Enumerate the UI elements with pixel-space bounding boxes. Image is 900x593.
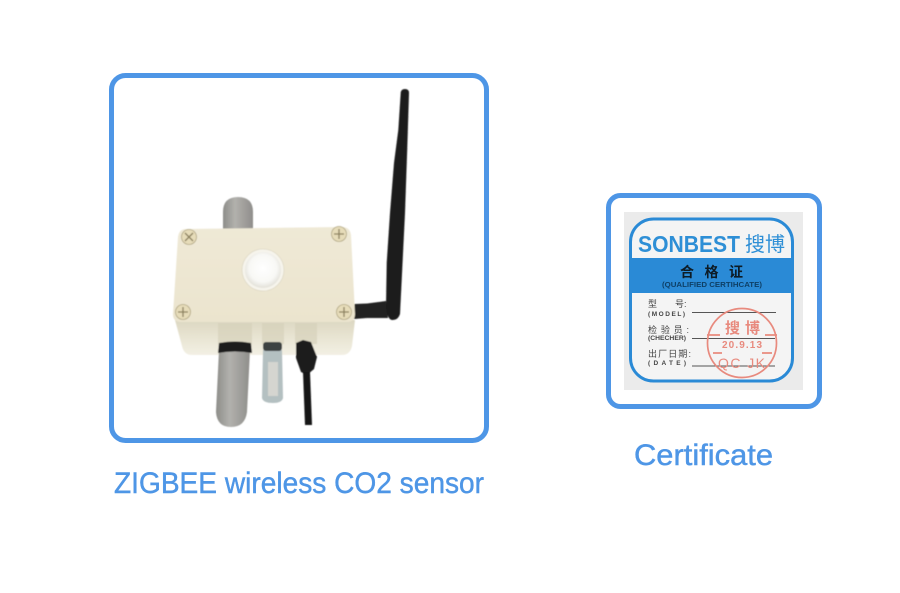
- enclosure lid: [173, 227, 355, 322]
- enclosure body: [175, 320, 355, 355]
- checker field: 检验员:: [648, 324, 689, 335]
- band title: 合格证: [680, 264, 743, 280]
- certificate label outline: [630, 219, 792, 381]
- humidity probe: [262, 342, 283, 403]
- red stamp: QC JK: [718, 355, 766, 371]
- panel: certificate frame: [608, 196, 820, 406]
- date field: [648, 348, 691, 367]
- red stamp: 20.9.13: [722, 340, 762, 351]
- antenna: [354, 89, 409, 320]
- red stamp: 搜博: [725, 319, 760, 337]
- label: sensor caption: ZIGBEE wireless CO2 sensor: [114, 467, 484, 500]
- checker field: [648, 324, 689, 342]
- red stamp: [707, 308, 777, 378]
- model field: 型: [648, 299, 657, 309]
- rear gray probe: [223, 197, 253, 230]
- label: certificate caption: Certificate: [634, 439, 773, 472]
- checker field: (CHECHER): [648, 335, 686, 342]
- model field: 号:: [675, 299, 687, 309]
- date field: (DATE): [648, 360, 686, 367]
- certificate card: [624, 212, 803, 390]
- model field: [648, 299, 687, 318]
- band subtitle: (QUALIFIED CERTIHCATE): [662, 280, 763, 289]
- date field: 出厂日期:: [648, 348, 691, 359]
- model field: (MODEL): [648, 311, 685, 318]
- icon: ZIGBEE wireless CO2 sensor device: [173, 89, 409, 427]
- front gray probe: [216, 342, 252, 427]
- light sensor dome: [242, 249, 284, 291]
- cable connector: [296, 340, 317, 425]
- brand name chinese: 搜博: [745, 233, 785, 256]
- panel: sensor photo frame: [112, 76, 486, 440]
- blue band: [630, 258, 793, 293]
- brand name: SONBEST: [638, 231, 740, 257]
- lid screws: [176, 226, 352, 320]
